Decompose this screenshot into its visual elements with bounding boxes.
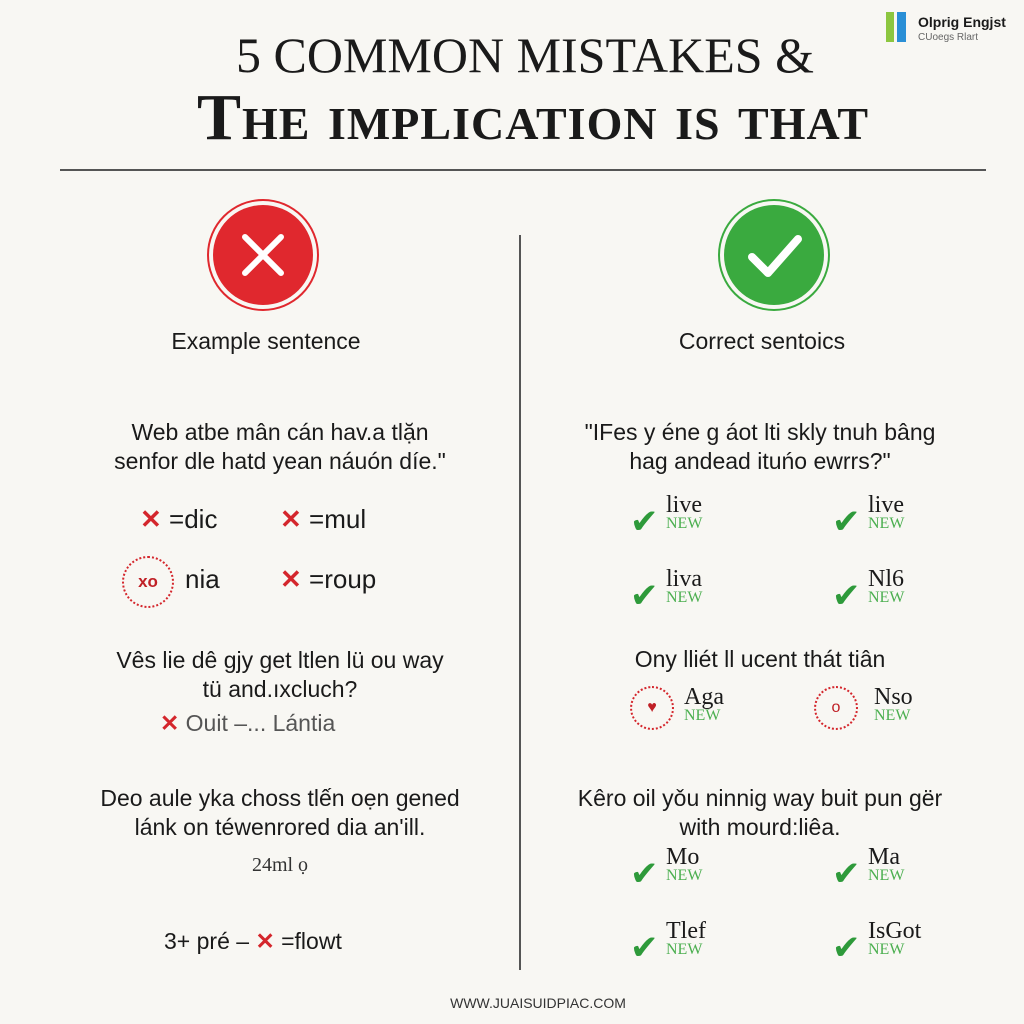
logo: Olprig Engjst (918, 14, 1006, 30)
example 3: ✕ Ouit –... Lántia (160, 710, 335, 736)
text block 1 (585, 419, 935, 474)
text block 1: hag andead ituńo ewrrs?" (629, 448, 891, 474)
subtitle: The implication is that (197, 81, 869, 154)
checks row 2: IsGot (868, 918, 921, 944)
text block 1: "IFes y éne g áot lti skly tnuh bâng (585, 419, 935, 445)
logo (886, 12, 1006, 43)
heading right: Correct sentoics (679, 328, 845, 354)
text block 2: Ony lliét ll ucent thát tiân (635, 646, 885, 672)
checks row 2: NEW (666, 941, 702, 958)
panel: correct: Aga (684, 684, 724, 710)
text block 1: Web atbe mân cán hav.a tlặn (131, 419, 429, 445)
text block 1: senfor dle hatd yean náuón díe." (114, 448, 446, 474)
checks row: ✔ (630, 577, 658, 615)
checks row: Nl6 (868, 566, 904, 592)
checks row: NEW (666, 589, 702, 606)
checks row: NEW (868, 589, 904, 606)
panel: correct: Nso (874, 684, 913, 710)
checks row: ✔ (630, 503, 658, 541)
checks row 2: ✔ (630, 855, 658, 893)
logo: CUoegs Rlart (918, 32, 978, 43)
example 4: 3+ pré – ✕ =flowt (164, 928, 342, 954)
checks row 2: ✔ (832, 929, 860, 967)
panel: mistakes: ✕ =mul (280, 504, 366, 534)
checks row 2: Ma (868, 844, 900, 870)
text block 3: with mourd:liêa. (679, 814, 841, 840)
examples row 1: ✕ =dic (140, 504, 217, 534)
checks row 2: ✔ (630, 929, 658, 967)
text block 3: lánk on téwenrored dia an'ill. (135, 814, 425, 840)
circle icons: ♥ (647, 699, 657, 716)
text block 3: Kêro oil yǒu ninnig way buit pun gër (578, 785, 942, 811)
checks row 2: NEW (666, 867, 702, 884)
panel: correct: NEW (684, 707, 720, 724)
checks row: ✔ (832, 503, 860, 541)
examples row 2: xo (138, 572, 158, 591)
number: 24ml ọ (252, 854, 308, 876)
text block 3: Deo aule yka choss tlến oẹn gened (100, 785, 460, 811)
icon: green check (724, 205, 824, 305)
checks row 2: NEW (868, 867, 904, 884)
checks row (630, 492, 904, 615)
circle icons (630, 686, 674, 730)
panel: correct: NEW (874, 707, 910, 724)
checks row: live (666, 492, 702, 518)
text block 2: Vês lie dê gjy get ltlen lü ou way (116, 647, 444, 673)
title: 5 COMMON MISTAKES & (236, 27, 814, 83)
checks row: NEW (666, 515, 702, 532)
text block 2: tü and.ıxcluch? (203, 676, 357, 702)
text block 2 (116, 647, 444, 702)
heading left: Example sentence (171, 328, 361, 354)
checks row 2 (630, 844, 922, 967)
footer: WWW.JUAISUIDPIAC.COM (450, 995, 626, 1011)
checks row: NEW (868, 515, 904, 532)
checks row 2: Mo (666, 844, 699, 870)
panel: mistakes (100, 419, 460, 954)
checks row 2: Tlef (666, 918, 706, 944)
text block 3 (578, 785, 942, 840)
checks row 2: ✔ (832, 855, 860, 893)
examples row 2 (122, 556, 174, 608)
panel: mistakes: ✕ =roup (280, 564, 376, 594)
panel: correct (578, 419, 942, 967)
checks row: live (868, 492, 904, 518)
checks row 2: NEW (868, 941, 904, 958)
checks row: liva (666, 566, 702, 592)
icon: red x (213, 205, 313, 305)
panel: mistakes: nia (185, 564, 220, 594)
checks row: ✔ (832, 577, 860, 615)
text block 3 (100, 785, 460, 840)
text block 1 (114, 419, 446, 474)
panel: correct: o (832, 699, 840, 716)
